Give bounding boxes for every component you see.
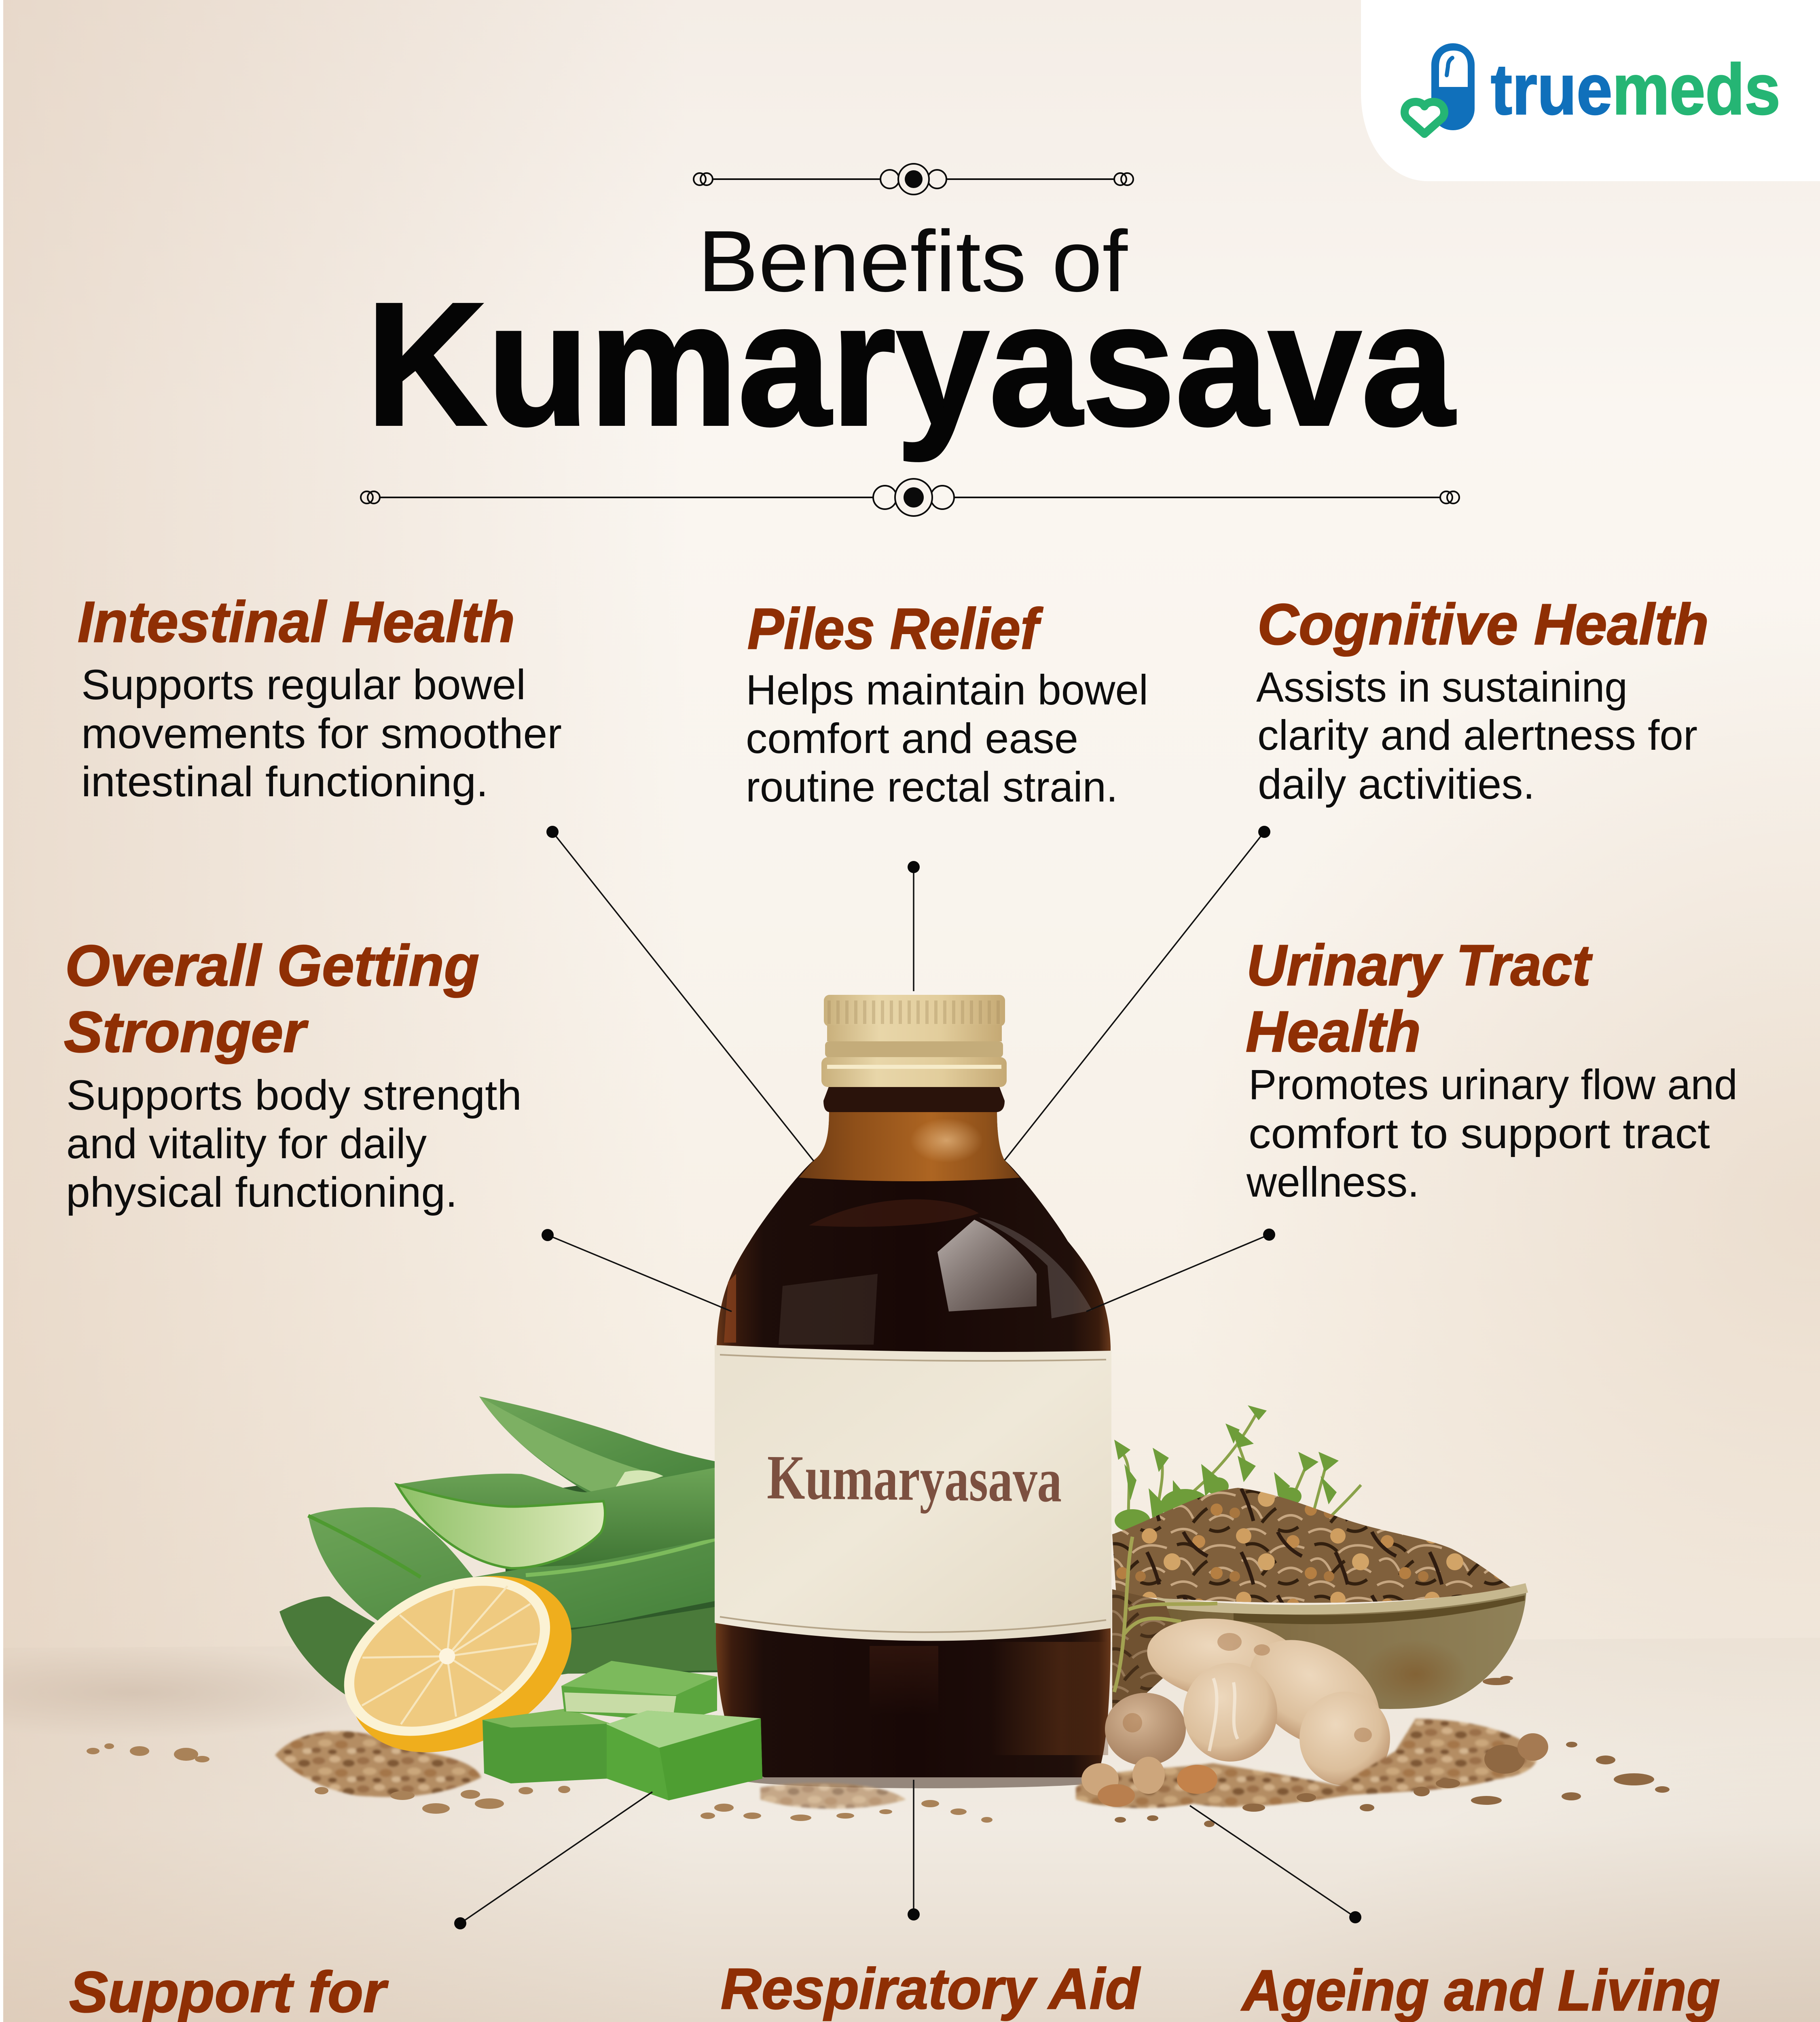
description: Supports regular bowel xyxy=(81,661,526,709)
description: physical functioning. xyxy=(66,1169,457,1216)
description: comfort and ease xyxy=(746,715,1078,762)
bottle shadow xyxy=(736,1769,1124,1788)
heading xyxy=(1246,933,1593,1064)
benefit: Urinary Tract Health xyxy=(1246,933,1737,1206)
connector: Overall Getting Stronger xyxy=(542,1229,732,1311)
gold bottle cap xyxy=(821,995,1007,1112)
logo wordmark: truemeds xyxy=(1491,49,1780,129)
description: routine rectal strain. xyxy=(746,764,1118,811)
description: Supports body strength xyxy=(66,1072,522,1119)
description: and vitality for daily xyxy=(66,1120,427,1168)
description: daily activities. xyxy=(1258,761,1535,808)
title line 1: Benefits of xyxy=(698,212,1128,310)
lower bottle reflections xyxy=(870,1642,1108,1755)
connector: Piles Relief xyxy=(908,861,920,991)
description: Helps maintain bowel xyxy=(746,666,1148,714)
icon: capsule xyxy=(1431,43,1475,130)
connector: Ageing and Living Longer xyxy=(1190,1806,1361,1923)
bottom ornament divider xyxy=(361,479,1459,516)
illustration: aloe cubes xyxy=(483,1661,762,1800)
illustration: aloe vera leaves xyxy=(279,1396,724,1705)
bottle label xyxy=(715,1345,1111,1641)
title xyxy=(366,212,1456,463)
description xyxy=(1246,1061,1737,1206)
illustration: lemon half xyxy=(317,1537,601,1788)
benefit: Overall Getting Stronger xyxy=(64,934,522,1216)
glass reflections xyxy=(724,1199,1092,1345)
description xyxy=(66,1072,522,1216)
label text: Kumaryasava xyxy=(767,1442,1062,1515)
top ornament divider xyxy=(694,164,1133,195)
heading: Stronger xyxy=(64,1000,309,1064)
heading xyxy=(64,934,479,1064)
benefit: Cognitive Health xyxy=(1256,592,1709,808)
description: wellness. xyxy=(1246,1159,1419,1206)
description: Promotes urinary flow and xyxy=(1249,1061,1737,1108)
bottle body xyxy=(716,1111,1111,1777)
title line 2: Kumaryasava xyxy=(366,266,1456,463)
illustration: seed scatter left xyxy=(87,1731,993,1823)
heading: Cognitive Health xyxy=(1257,592,1709,657)
connector: Support for Chronic Conditions xyxy=(454,1792,652,1929)
connector: Urinary Tract Health xyxy=(1086,1229,1275,1311)
connector: Cognitive Health xyxy=(1005,826,1270,1160)
description: comfort to support tract xyxy=(1249,1110,1710,1157)
heading: Respiratory Aid xyxy=(721,1957,1141,2021)
heading: Piles Relief xyxy=(747,597,1043,661)
back left cube xyxy=(483,1709,611,1783)
connector: Respiratory Aid xyxy=(908,1780,920,1920)
description xyxy=(1256,664,1697,808)
description xyxy=(746,666,1148,811)
description: movements for smoother xyxy=(81,710,562,757)
description xyxy=(81,661,562,806)
connector: Intestinal Health xyxy=(546,826,814,1161)
icon: heart xyxy=(1405,102,1444,134)
illustration: herbs and spice bowl xyxy=(1112,1405,1528,1711)
description: Assists in sustaining xyxy=(1256,664,1627,711)
description: clarity and alertness for xyxy=(1257,712,1697,759)
top cube xyxy=(561,1661,717,1723)
benefit: Piles Relief xyxy=(746,597,1148,811)
thyme sprigs xyxy=(1114,1405,1361,1532)
heading: Ageing and Living xyxy=(1241,1959,1720,2022)
logo panel: truemeds xyxy=(1361,0,1820,181)
illustration: ginger roots xyxy=(1105,1609,1399,1785)
illustration: seed scatter right xyxy=(1076,1676,1670,1827)
description: intestinal functioning. xyxy=(81,758,488,806)
heading: Intestinal Health xyxy=(78,590,515,654)
benefit: Intestinal Health xyxy=(78,590,562,806)
heading: Health xyxy=(1246,1000,1421,1064)
amber neck xyxy=(799,1110,1020,1181)
brass bowl xyxy=(1114,1583,1528,1709)
front right cube xyxy=(607,1711,762,1800)
illustration: amber bottle xyxy=(715,995,1124,1788)
heading: Overall Getting xyxy=(65,934,479,998)
heading: Urinary Tract xyxy=(1246,933,1593,998)
spice heap in bowl xyxy=(1112,1488,1511,1711)
